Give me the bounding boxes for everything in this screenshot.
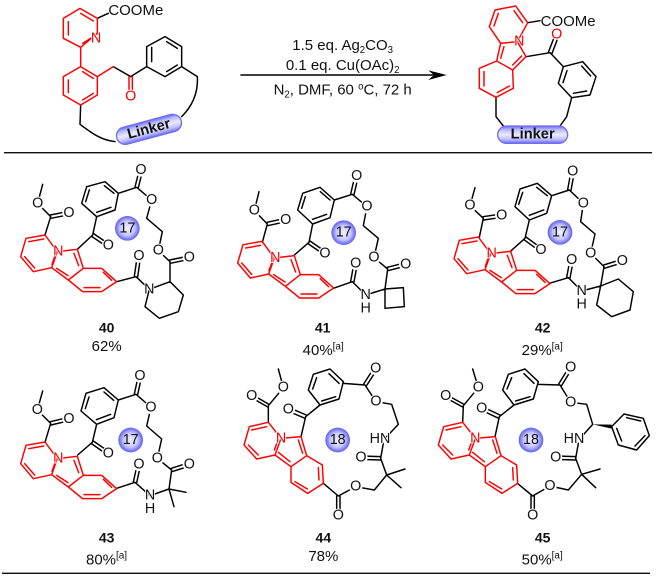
compound 41: O [249,203,260,219]
reactant structure [63,2,197,146]
ring size badge 17 [548,220,572,245]
ring size badge 18: 18 [523,432,539,448]
reactant structure: O [125,89,136,105]
ring size badge 17 [115,216,140,241]
yield 50%: 50% [522,551,552,568]
compound 42: O [535,242,547,258]
linker pill [115,112,183,146]
compound 42: O [464,198,476,214]
compound 44: O [350,479,361,495]
compound 44: O [333,508,344,524]
reaction arrow with conditions: 3 [388,45,393,56]
compound 45: O [544,478,556,494]
compound 41: O [280,212,291,228]
yield 80%: [a] [116,551,127,562]
reaction arrow with conditions: C, 72 h [363,81,412,98]
red indolizine core: N [486,246,497,262]
compound 43: O [63,411,75,427]
compound 43: O [133,456,145,472]
compound 41: O [361,199,373,215]
compound 44 [244,360,405,565]
ring size badge 17 [118,428,143,452]
product structure [479,6,596,143]
red indolizine core: N [53,451,64,467]
compound 43: O [145,399,157,415]
yield 29%: [a] [552,341,563,352]
compound 43: N [145,488,155,504]
red indolizine core: N [470,430,481,446]
compound number 40: 40 [99,320,115,336]
reaction arrow with conditions: o [358,82,363,93]
compound 43: O [32,402,43,418]
compound 40: O [184,250,195,266]
compound 41: O [351,168,362,184]
compound number 43: 43 [99,530,115,546]
linker pill: Linker [126,116,173,143]
compound 45: O [565,360,576,376]
reaction arrow with conditions: 0.1 eq. Cu(OAc) [286,57,394,74]
compound 42: O [585,245,596,261]
compound 43: O [134,368,146,384]
compound 41: H [360,300,371,316]
reaction arrow with conditions: 2 [360,45,365,56]
compound 42: O [567,164,578,180]
reaction arrow with conditions: 1.5 eq. Ag [292,37,360,54]
compound 41: O [400,256,411,272]
compound 42: O [496,208,507,224]
compound 40: O [63,205,75,221]
compound 45: O [527,508,538,524]
compound 45 [438,360,649,568]
reactant structure: COOMe [108,2,163,19]
compound 44: N [276,430,286,446]
compound 44: O [283,401,294,417]
red indolizine core [454,237,550,294]
compound 40: N [144,281,155,297]
compound 40: O [146,192,157,208]
red indolizine core [21,442,117,499]
compound 40: O [133,248,145,264]
compound 41: O [350,255,361,271]
yield 50%: [a] [552,551,563,562]
reaction arrow with conditions: 2 [284,89,290,100]
yield 80%: 80% [86,551,116,568]
compound 45: O [473,380,484,396]
compound 42 [454,164,633,359]
product structure: COOMe [541,13,596,30]
ring size badge 18 [325,428,350,452]
compound number 44: 44 [316,530,331,546]
product structure: O [551,26,562,42]
compound 41 [238,168,411,359]
red indolizine core [238,241,334,298]
reaction arrow with conditions: , DMF, 60 [290,81,358,98]
compound 40: O [135,162,147,178]
compound number 41: 41 [315,320,331,336]
reaction arrow with conditions [241,37,447,100]
compound 43: O [184,456,195,472]
ring size badge 17: 17 [336,225,352,241]
compound 41: O [319,245,331,261]
ring size badge 17: 17 [552,224,568,240]
compound 40: O [32,195,43,211]
red indolizine core [244,422,323,493]
compound 44: O [370,360,381,376]
yield 40%: [a] [333,341,344,352]
compound 45: O [476,400,487,416]
reaction arrow with conditions: N [274,81,284,98]
ring size badge 17 [331,220,356,245]
compound 43: O [103,445,114,461]
compound 41: O [368,250,380,266]
ring size badge 18: 18 [330,432,346,448]
compound 44: O [355,450,367,466]
ring size badge 17: 17 [123,432,139,448]
red indolizine core [21,235,117,292]
compound 45: O [440,388,451,404]
compound 42: O [566,252,577,268]
yield 29%: 29% [522,342,552,359]
compound 40: N [53,244,64,260]
compound 43 [21,368,195,568]
yield 78%: 78% [308,548,338,565]
compound 44: O [370,394,382,410]
compound 45: O [565,394,576,410]
reaction arrow with conditions: 2 [394,65,399,76]
compound 42: O [578,195,589,211]
compound 45: HN [564,431,584,447]
compound 40 [21,162,195,355]
linker pill: Linker [511,127,555,143]
compound 40: O [103,238,114,254]
compound number 45: 45 [535,530,551,546]
compound 41: N [360,287,371,303]
compound 43: H [145,501,155,517]
compound 42: N [576,283,587,299]
ring size badge 17: 17 [119,220,135,236]
compound 44: HN [370,431,390,447]
compound 43: O [152,450,163,466]
compound 44: O [246,388,257,404]
yield 62%: 62% [92,338,122,355]
compound 42: H [576,296,587,312]
reaction arrow with conditions: CO [365,37,388,54]
red indolizine core: N [270,250,281,266]
compound 42: O [617,253,628,269]
ring size badge 18 [519,428,543,452]
yield 40%: 40% [303,342,333,359]
product structure: N [514,34,525,50]
compound 40: O [153,243,164,259]
red indolizine core [438,422,518,493]
compound 44: O [278,380,289,396]
compound 45: O [550,450,561,466]
reactant structure: N [91,30,101,46]
compound number 42: 42 [535,320,551,336]
